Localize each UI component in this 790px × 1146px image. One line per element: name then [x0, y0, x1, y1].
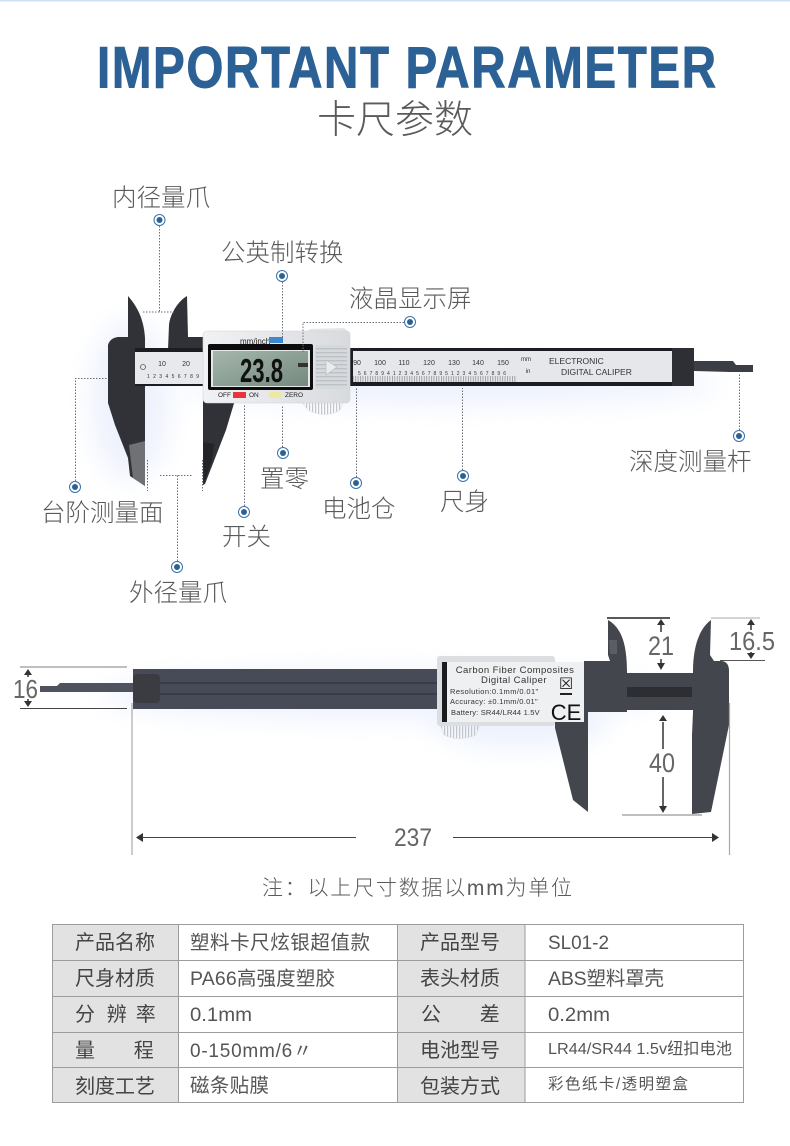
callout: battery bay	[322, 388, 396, 523]
scale strip right: 150	[497, 360, 509, 367]
spec label: Accuracy: ±0.1mm/0.01"	[450, 697, 538, 706]
callout: outer jaw	[129, 460, 227, 607]
row 3: 0.2mm	[548, 1004, 610, 1026]
callout: unit switch: 公英制转换	[221, 239, 344, 267]
scale strip right: 100	[374, 360, 386, 367]
spec label: Carbon Fiber Composites	[456, 665, 574, 676]
row 3: 分	[75, 1003, 95, 1026]
callout: zero: 置零	[260, 466, 309, 493]
row 1	[75, 931, 609, 954]
row 4: 程	[128, 1039, 154, 1062]
scale strip right	[353, 351, 672, 382]
row 5: 刻度工艺	[75, 1075, 155, 1098]
scale strip right: mm	[521, 357, 531, 363]
dimension: 237	[132, 703, 730, 855]
scale strip right: DIGITAL CALIPER	[561, 367, 632, 377]
beam	[133, 669, 453, 709]
dimension: 21	[607, 618, 674, 670]
row 2: 尺身材质	[75, 967, 155, 990]
callout: step face	[41, 378, 164, 527]
top edge line	[0, 0, 790, 2]
scale strip right: in	[526, 369, 530, 375]
row 4: 电池型号	[420, 1039, 500, 1062]
row 5: 彩色纸卡/透明塑盒	[548, 1075, 688, 1093]
dimension: 16: 16	[13, 674, 38, 704]
callout: LCD: 液晶显示屏	[349, 285, 472, 313]
row 2: PA66高强度塑胶	[190, 968, 335, 990]
gear wheel	[440, 724, 480, 738]
row 1: 产品名称	[75, 931, 155, 954]
spec label: CE	[551, 700, 581, 725]
scale strip left: 1 2 3 4 5 6 7 8 9	[147, 374, 199, 380]
row 2: 表头材质	[420, 967, 500, 990]
row 5	[75, 1075, 688, 1098]
scale strip right: 140	[472, 360, 484, 367]
row 3: 辨	[101, 1003, 127, 1026]
spec label: Digital Caliper	[481, 675, 547, 686]
main beam	[135, 348, 694, 386]
row 3: 0.1mm	[190, 1004, 252, 1026]
dimension: 16.5	[711, 618, 775, 660]
bottom caliper diagram	[40, 620, 729, 814]
note: 注：以上尺寸数据以mm为单位	[262, 877, 572, 900]
left jaws	[108, 296, 235, 486]
spec table	[52, 924, 744, 1103]
dimension: 16	[13, 667, 127, 708]
row 2	[75, 967, 664, 990]
callout: ruler body: 尺身	[440, 488, 489, 516]
display head: 23.8	[240, 352, 283, 389]
callout: unit switch	[221, 239, 344, 340]
callout: power switch: 开关	[222, 523, 271, 551]
callout: power switch	[222, 405, 271, 551]
row 3: 率	[130, 1003, 156, 1026]
display head: ZERO	[285, 392, 303, 399]
callout: outer jaw: 外径量爪	[129, 579, 227, 607]
scale strip left	[135, 352, 203, 384]
spec label: ☒	[559, 674, 573, 693]
row 3: 差	[474, 1003, 500, 1026]
row 3: 公	[421, 1004, 441, 1026]
row 5: 包装方式	[420, 1075, 500, 1098]
callout: ruler body	[440, 388, 489, 516]
row 1: SL01-2	[548, 933, 609, 954]
callout: step face: 台阶测量面	[41, 499, 164, 527]
callout: battery bay: 电池仓	[322, 495, 396, 523]
spec label	[447, 662, 584, 725]
top caliper diagram	[90, 296, 753, 486]
callout: inner jaw: 内径量爪	[112, 184, 210, 212]
row 3	[75, 1003, 610, 1026]
scale strip right: 90	[353, 360, 361, 367]
scale strip right: 5 6 7 8 9 4 1 2 3 4 5 6 7 8 9 5 1 2 3 4 5 6 7 8 9 6	[358, 371, 506, 377]
spec label: Battery: SR44/LR44 1.5V	[451, 708, 540, 717]
spec label: Resolution:0.1mm/0.01"	[450, 687, 539, 696]
callout: inner jaw	[112, 184, 210, 312]
title: IMPORTANT PARAMETER	[97, 36, 716, 101]
row 1: 塑料卡尺炫银超值款	[190, 932, 370, 954]
fixed body and jaws	[555, 620, 729, 814]
dimension: 40: 40	[649, 748, 675, 778]
scale strip right: ELECTRONIC	[549, 356, 604, 366]
row 2: ABS塑料罩壳	[548, 968, 664, 990]
callout: LCD	[303, 285, 472, 352]
row 4: 0-150mm/6〃	[190, 1041, 312, 1062]
thumb wheel	[302, 402, 343, 414]
callout: depth rod	[629, 373, 752, 476]
row 4	[75, 1039, 732, 1062]
head back	[437, 656, 555, 726]
row 4: 量	[75, 1040, 95, 1062]
row 4: LR44/SR44 1.5v纽扣电池	[548, 1040, 732, 1058]
display head: ON	[249, 392, 259, 399]
scale strip left: 20	[182, 361, 190, 368]
row 1: 产品型号	[420, 931, 500, 954]
subtitle: 卡尺参数	[317, 99, 473, 142]
row 5: 磁条贴膜	[190, 1075, 269, 1097]
scale strip right: 120	[423, 360, 435, 367]
depth rod	[40, 683, 135, 692]
dimension: 16.5: 16.5	[729, 626, 775, 656]
callout: zero	[260, 405, 309, 493]
scale strip left: 10	[158, 361, 166, 368]
scale strip right: 110	[398, 360, 410, 367]
dimension: 21: 21	[648, 631, 674, 661]
callout: depth rod: 深度测量杆	[629, 448, 752, 476]
display head: mm/inch	[240, 337, 270, 346]
end cap	[133, 674, 160, 703]
scale strip right: 130	[448, 360, 460, 367]
display head: OFF	[218, 392, 231, 399]
dimension: 40	[622, 715, 702, 815]
dimension: 237: 237	[394, 824, 432, 852]
display head	[203, 331, 350, 403]
